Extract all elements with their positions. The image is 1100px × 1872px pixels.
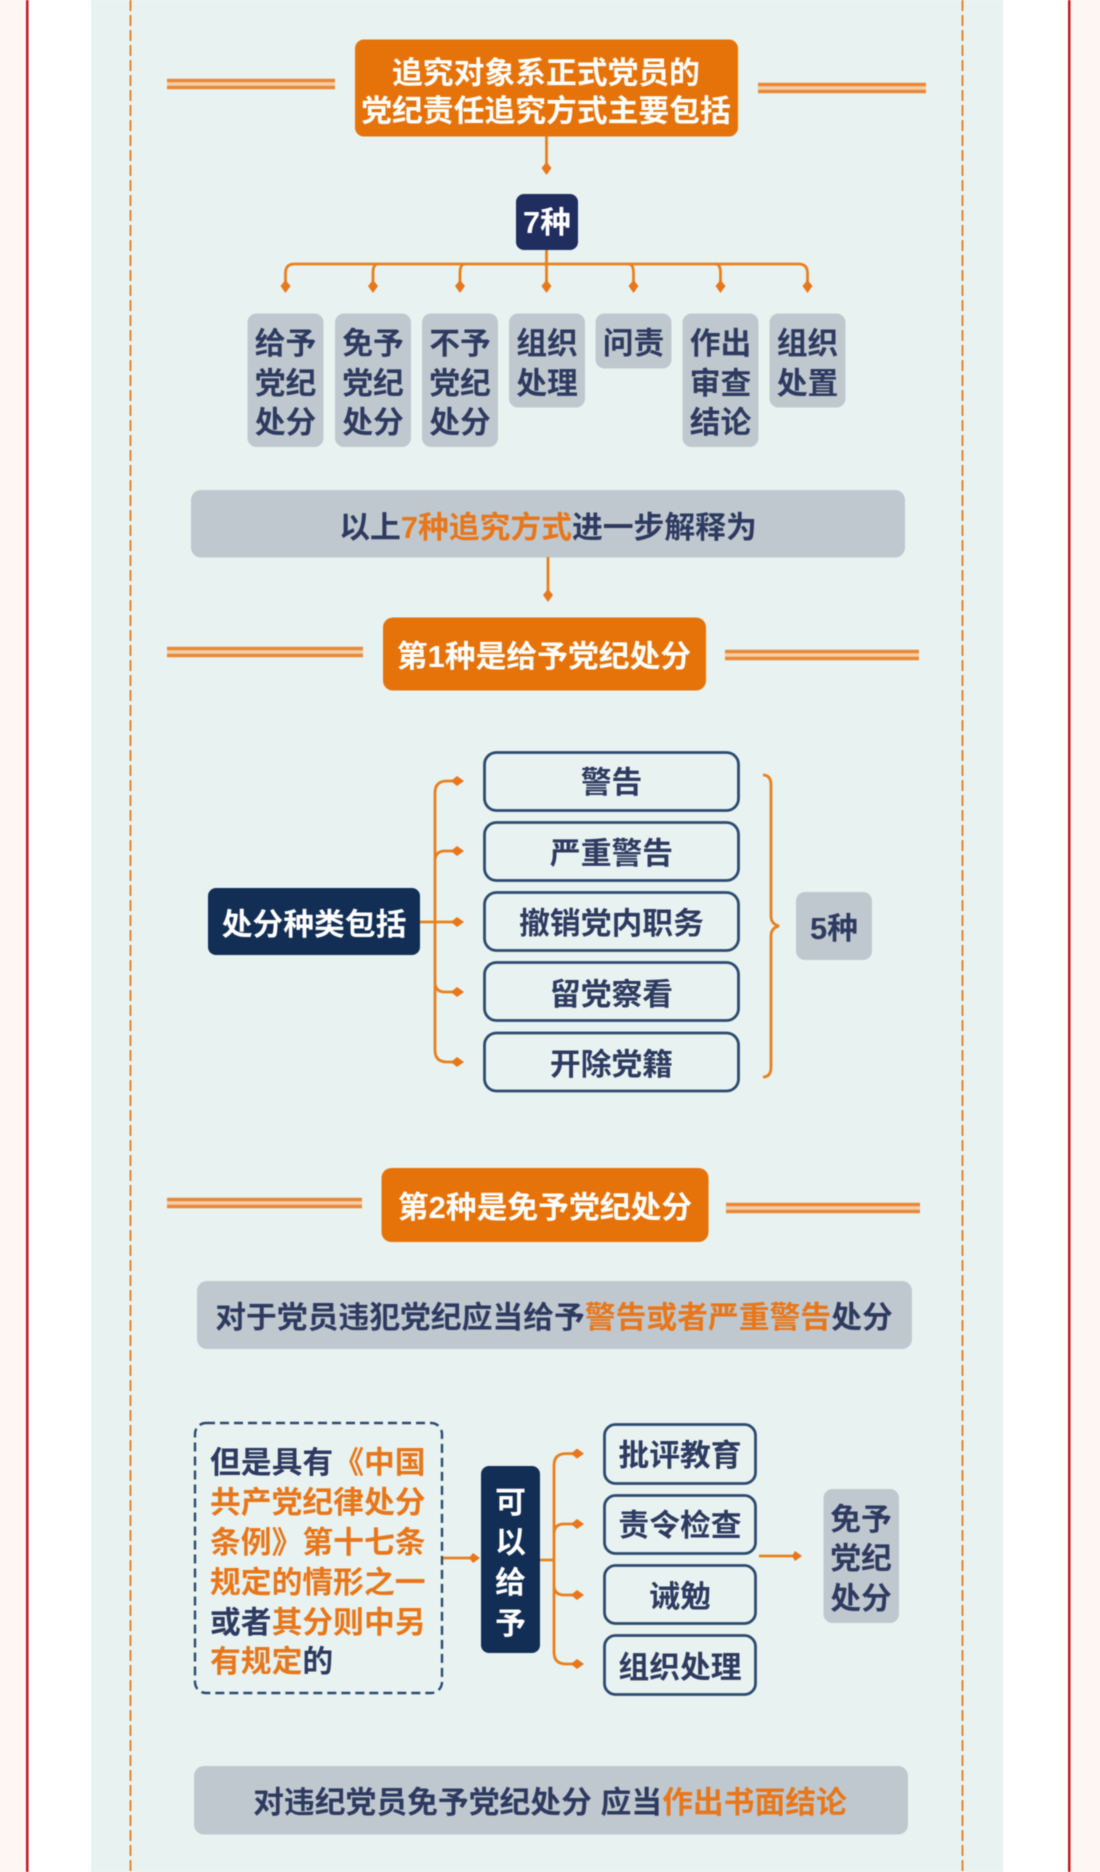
callout: further explanation [191,490,905,558]
item: 免予党纪处分: 处分 [342,405,404,440]
bracket: four branches [540,1449,584,1669]
bracket: five branches [420,776,464,1067]
callout: written conclusion [194,1766,908,1834]
item: 免予党纪处分: 免予 [342,326,404,361]
heading: first kind: 第1种是给予党纪处分 [397,639,691,674]
item: 作出审查结论 [682,314,758,447]
result: exemption: 免予 [830,1502,892,1537]
arrow: down to first kind [543,557,553,602]
dashed box: conditions: 或者其分则中另 [210,1605,426,1640]
dashed frame left [130,0,132,1872]
item: 免予党纪处分 [335,314,411,447]
callout: written conclusion: 对违纪党员免予党纪处分 应当作出书面结论 [253,1785,847,1820]
badge: 7 kinds [516,194,578,250]
option: 责令检查: 责令检查 [618,1508,742,1543]
badge: 7 kinds: 7种 [523,205,571,240]
option: 留党察看 [484,962,738,1020]
item: 给予党纪处分 [248,314,324,447]
badge: 5 kinds: 5种 [810,911,858,946]
option: 撤销党内职务: 撤销党内职务 [519,906,704,941]
item: 不予党纪处分: 不予 [429,326,491,361]
item: 不予党纪处分: 党纪 [429,366,491,401]
option: 组织处理: 组织处理 [618,1650,742,1685]
option: 开除党籍: 开除党籍 [550,1047,673,1082]
callout: further explanation: 以上7种追究方式进一步解释为 [339,510,757,545]
callout: members who violate: 对于党员违犯党纪应当给予警告或者严重警告处分 [215,1300,893,1335]
dashed box: conditions: 条例》第十七条 [210,1525,426,1560]
item: 给予党纪处分: 给予 [255,326,316,361]
dashed box: conditions: 规定的情形之一 [210,1565,426,1600]
option: 批评教育 [604,1424,756,1484]
heading: second kind: 第2种是免予党纪处分 [398,1190,692,1225]
option: 撤销党内职务 [484,892,738,950]
dashed box: conditions [195,1423,442,1693]
item: 不予党纪处分: 处分 [429,405,491,440]
label: may give [481,1466,540,1653]
result: exemption: 处分 [830,1581,892,1616]
option: 严重警告: 严重警告 [550,836,673,871]
label: kinds of discipline [208,888,420,955]
item: 问责 [596,314,672,368]
result: exemption [824,1489,899,1623]
tree connector: 7 branches [280,250,812,293]
item: 组织处置: 组织 [777,326,838,361]
option: 批评教育: 批评教育 [618,1438,742,1473]
item: 组织处置: 处置 [777,366,838,401]
option: 警告 [484,752,738,810]
dashed box: conditions: 但是具有《中国 [210,1445,426,1480]
option: 警告: 警告 [581,765,642,800]
arrow: heading to 7 kinds [542,136,552,175]
item: 作出审查结论: 审查 [690,366,751,401]
callout: members who violate [197,1281,912,1349]
heading: accountability methods: 追究对象系正式党员的 [392,56,700,90]
option: 严重警告 [484,822,738,880]
item: 问责: 问责 [603,326,664,361]
item: 作出审查结论: 结论 [690,405,751,440]
label: kinds of discipline: 处分种类包括 [222,907,406,942]
option: 组织处理 [604,1636,756,1694]
item: 给予党纪处分: 党纪 [255,366,316,401]
item: 给予党纪处分: 处分 [255,405,316,440]
option: 责令检查 [604,1496,756,1554]
item: 组织处理 [509,314,585,408]
heading: first kind [167,618,919,690]
heading: second kind [167,1168,920,1242]
item: 组织处置 [770,314,846,408]
item: 免予党纪处分: 党纪 [342,366,404,401]
option: 诫勉: 诫勉 [649,1579,711,1614]
dashed frame right [962,0,964,1872]
item: 组织处理: 处理 [516,366,578,401]
label: may give: 以 [495,1525,526,1560]
label: may give: 可 [495,1485,526,1520]
item: 作出审查结论: 作出 [690,326,751,361]
dashed box: conditions: 有规定的 [210,1644,333,1679]
option: 留党察看: 留党察看 [550,977,673,1012]
label: may give: 给 [495,1565,526,1600]
item: 不予党纪处分 [422,314,498,447]
option: 诫勉 [604,1566,756,1624]
brace: right [763,775,779,1077]
label: may give: 予 [495,1606,526,1641]
dashed box: conditions: 共产党纪律处分 [210,1485,426,1520]
option: 开除党籍 [484,1033,738,1091]
arrow: conditions to may give [443,1553,480,1563]
item: 组织处理: 组织 [516,326,578,361]
arrow: to exemption [759,1551,802,1561]
badge: 5 kinds [796,892,872,960]
heading: accountability methods [167,40,926,136]
result: exemption: 党纪 [830,1541,892,1576]
heading: accountability methods: 党纪责任追究方式主要包括 [361,94,731,128]
